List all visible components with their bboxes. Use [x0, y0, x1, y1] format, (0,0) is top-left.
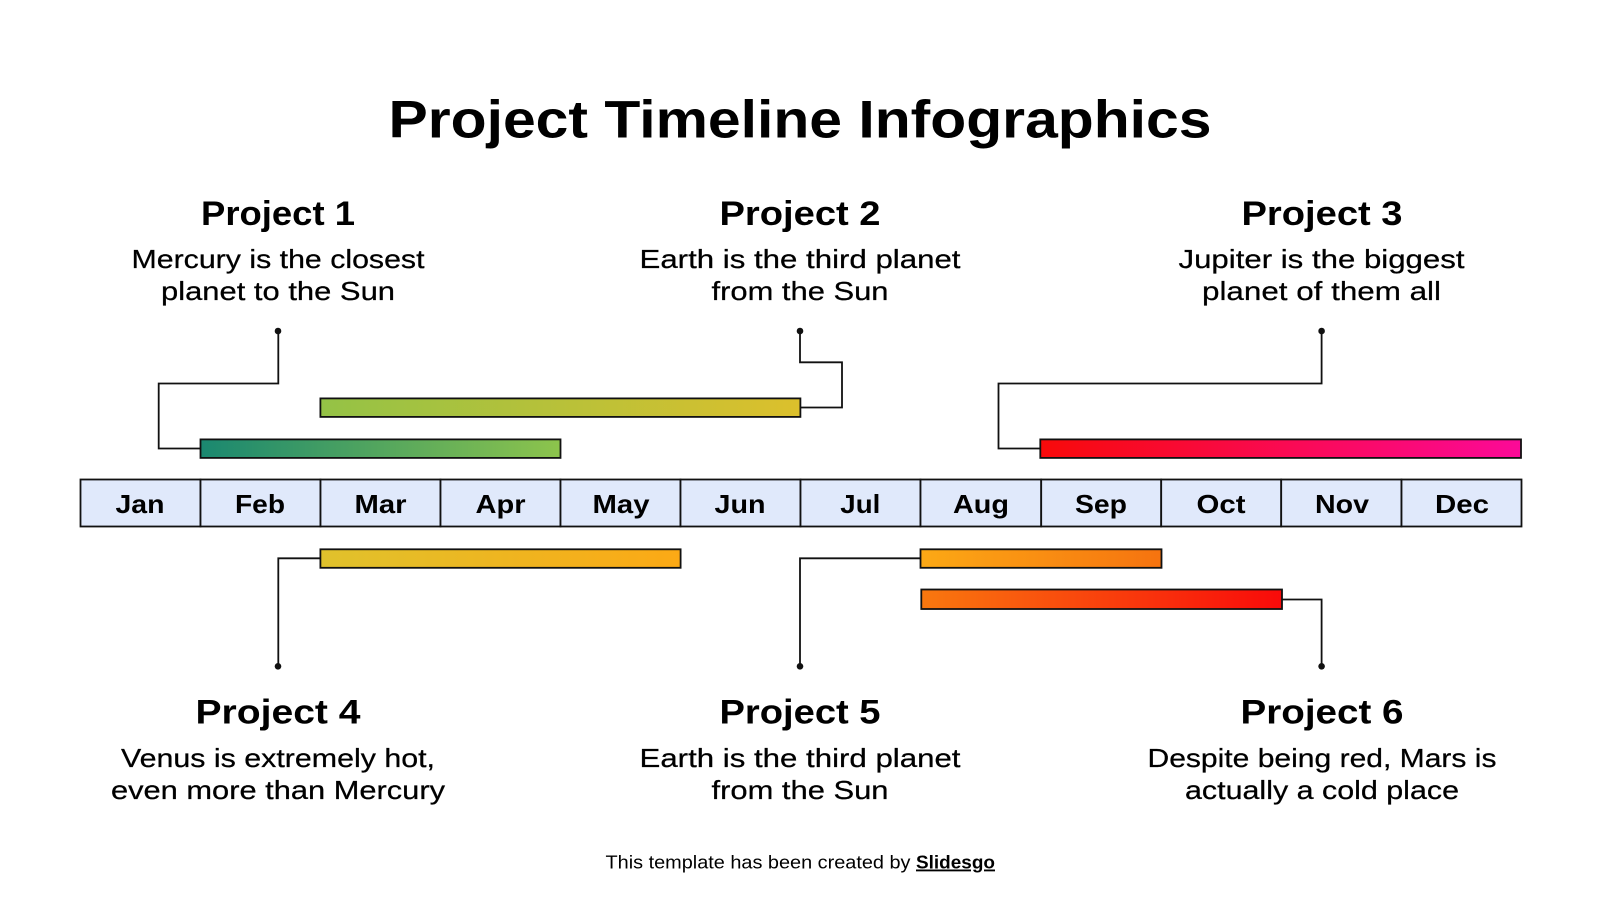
month: Mar — [320, 480, 440, 526]
bar: project 3, Sep to Dec — [1040, 439, 1521, 458]
month: Apr: Apr — [476, 489, 526, 519]
month: May: May — [592, 489, 650, 519]
month: Feb — [200, 480, 320, 526]
description: project 1: planet to the Sun — [161, 276, 395, 306]
month: Sep: Sep — [1075, 489, 1127, 519]
description: project 6: actually a cold place — [1185, 775, 1459, 805]
panel: project 1 text — [132, 195, 425, 306]
month: Oct: Oct — [1196, 489, 1246, 519]
month: Jan — [80, 480, 200, 526]
month: Dec: Dec — [1435, 489, 1489, 519]
month: Jul — [800, 480, 920, 526]
description: project 3 — [1178, 244, 1465, 306]
connector: project 5 — [797, 558, 920, 670]
month: Dec — [1402, 480, 1522, 526]
bar: project 1, Feb to Apr — [200, 439, 560, 458]
bar: project 5, Aug to Sep — [920, 549, 1162, 568]
description: project 5: from the Sun — [712, 775, 888, 805]
description: project 2: from the Sun — [712, 276, 888, 306]
connector: project 3 — [998, 328, 1325, 448]
month: Jul: Jul — [840, 489, 880, 519]
description: project 5: Earth is the third planet — [640, 743, 961, 773]
connector: project 2 — [797, 328, 842, 408]
footer credit: This template has been created by — [606, 852, 911, 872]
description: project 1: Mercury is the closest — [132, 244, 425, 274]
description: project 6 — [1148, 743, 1496, 805]
description: project 1 — [132, 244, 425, 306]
connector: project 6 — [1282, 600, 1325, 670]
description: project 3: Jupiter is the biggest — [1178, 244, 1465, 274]
panel: project 6 text — [1148, 694, 1496, 805]
title: Project Timeline Infographics — [388, 90, 1212, 150]
month: Oct — [1161, 480, 1281, 526]
month: Jun — [680, 480, 800, 526]
heading: project 3: Project 3 — [1242, 195, 1402, 233]
description: project 4 — [111, 743, 445, 805]
description: project 4: even more than Mercury — [111, 775, 445, 805]
month: Nov: Nov — [1315, 489, 1370, 519]
month: May — [560, 480, 680, 526]
description: project 5 — [640, 743, 961, 805]
bar: project 2, Mar to Jun — [320, 398, 800, 417]
description: project 6: Despite being red, Mars is — [1148, 743, 1496, 773]
heading: project 5: Project 5 — [720, 694, 880, 732]
month: Aug: Aug — [953, 489, 1009, 519]
bar: project 6, Aug to Oct — [921, 590, 1282, 609]
month: Apr — [440, 480, 560, 526]
month: Sep — [1041, 480, 1161, 526]
connector: project 4 — [275, 558, 320, 670]
heading: project 2: Project 2 — [720, 195, 880, 233]
month: Jun: Jun — [714, 489, 766, 519]
panel: project 5 text — [640, 694, 961, 805]
month: Feb: Feb — [235, 489, 285, 519]
heading: project 1: Project 1 — [201, 195, 355, 233]
month: Mar: Mar — [354, 489, 406, 519]
bar: project 4, Mar to May — [320, 549, 681, 568]
connector: project 1 — [159, 328, 281, 448]
panel: project 2 text — [640, 195, 961, 306]
month: Nov — [1281, 480, 1402, 526]
description: project 2 — [640, 244, 961, 306]
heading: project 4: Project 4 — [196, 694, 361, 732]
description: project 3: planet of them all — [1202, 276, 1441, 306]
description: project 2: Earth is the third planet — [640, 244, 961, 274]
month axis — [80, 480, 1522, 526]
heading: project 6: Project 6 — [1240, 694, 1404, 732]
description: project 4: Venus is extremely hot, — [121, 743, 435, 773]
panel: project 3 text — [1178, 195, 1465, 306]
month: Aug — [920, 480, 1041, 526]
footer credit: Slidesgo — [916, 852, 995, 872]
month: Jan: Jan — [116, 489, 164, 519]
panel: project 4 text — [111, 694, 445, 805]
